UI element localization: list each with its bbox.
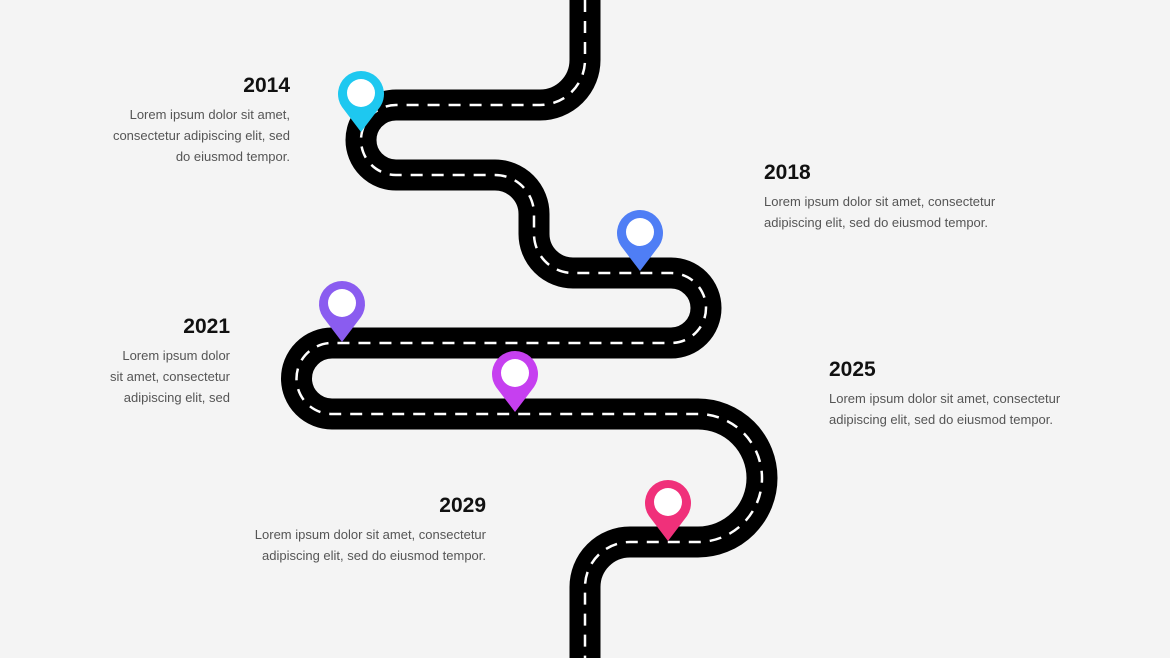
text: 2029: 2029 (439, 494, 486, 517)
pin: 2014 (338, 71, 384, 132)
text: 2014: Lorem ipsum dolor sit amet, (130, 107, 290, 122)
text: 2018: 2018 (764, 161, 811, 184)
text: 2025: Lorem ipsum dolor sit amet, consectetur (829, 391, 1060, 406)
text: 2021 (110, 315, 230, 405)
pin: 2018 (617, 210, 663, 271)
text: 2025 (829, 358, 1060, 427)
text: 2014: consectetur adipiscing elit, sed (113, 128, 290, 143)
text: 2029 (255, 494, 486, 563)
text: 2021: adipiscing elit, sed (124, 390, 230, 405)
text: 2025: adipiscing elit, sed do eiusmod tempor. (829, 412, 1053, 427)
text: 2025: 2025 (829, 358, 876, 381)
text: 2018: Lorem ipsum dolor sit amet, consectetur (764, 194, 995, 209)
text: 2014: do eiusmod tempor. (176, 149, 290, 164)
pin: 2029 (645, 480, 691, 541)
text: 2018: adipiscing elit, sed do eiusmod tempor. (764, 215, 988, 230)
pin: 2021 (319, 281, 365, 342)
text: 2021: sit amet, consectetur (110, 369, 230, 384)
pin: 2025 (492, 351, 538, 412)
text: 2021: 2021 (183, 315, 230, 338)
text: 2029: Lorem ipsum dolor sit amet, consectetur (255, 527, 486, 542)
text: 2021: Lorem ipsum dolor (122, 348, 230, 363)
text: 2014: 2014 (243, 74, 290, 97)
text: 2029: adipiscing elit, sed do eiusmod tempor. (262, 548, 486, 563)
text: 2014 (113, 74, 290, 164)
text: 2018 (764, 161, 995, 230)
